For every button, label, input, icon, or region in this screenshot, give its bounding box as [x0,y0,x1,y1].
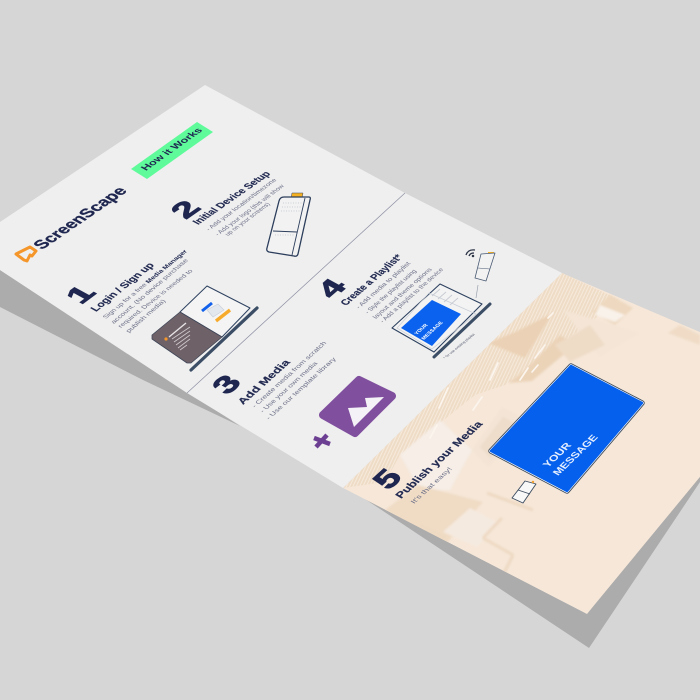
step 3 text: - Use our template library [264,356,338,421]
footnote: * Or use existing playlist [442,332,476,359]
step 3 text: - Use your own media [258,360,320,414]
icon: plus [314,435,330,447]
step 1 text: Sign up for a free Media Manager [101,248,189,320]
step 4 laptop illustration: MESSAGE [421,321,445,341]
icon: media image [323,380,392,433]
step 2 heading: Initial Device Setup [190,170,273,226]
step 3 text: - Create media from scratch [250,340,328,409]
photo background [343,273,700,614]
icon: wifi signal [466,250,475,257]
logo icon [16,247,36,261]
step 5 heading: Publish your Media [392,419,486,500]
step 1 number: 1 [59,281,102,308]
step 5 text: It's that easy! [409,466,454,505]
step 4 text: layout and theme options [371,266,434,320]
screen illustration: MESSAGE [551,433,601,477]
sheet shadows [0,270,700,648]
screen illustration [491,366,642,491]
step 1 text: required. Device is needed to [116,268,195,329]
step 1 heading: Login / Sign up [88,261,157,313]
screen illustration: YOUR [541,441,574,469]
panel: login and device setup [0,85,405,393]
step 4 text: - Add media to playlist [354,261,412,310]
step 4 laptop illustration [392,284,490,357]
small device illustration [475,252,495,298]
step 1 tablet illustration [152,286,257,370]
step 2 text: - Add your location/timezone [204,177,279,232]
step 3 number: 3 [205,370,248,398]
usb device [512,481,536,503]
step 2 text: up on your screens) [223,201,272,237]
step 2 device illustration [267,193,310,256]
step 4 number: 4 [310,274,353,302]
step 4 text: - Style the playlist using [363,268,418,315]
badge: how it works: How it Works [139,127,205,172]
step 4 text: - Add a playlist to the device [378,267,445,324]
step 5 number: 5 [366,464,410,494]
step 1 text: publish media) [124,298,168,334]
panel: publish your media [343,273,700,614]
brand name: ScreenScape [30,184,132,252]
step 1 text: account. (No device purchase [109,257,190,325]
step 2 number: 2 [163,196,208,223]
panel: add media and create playlist [187,193,562,488]
step 4 laptop illustration: YOUR [414,323,430,336]
step 3 heading: Add Media [235,358,293,406]
step 4 heading: Create a Playlist* [338,253,405,307]
step 2 text: - Add your logo (this will show [213,183,286,237]
